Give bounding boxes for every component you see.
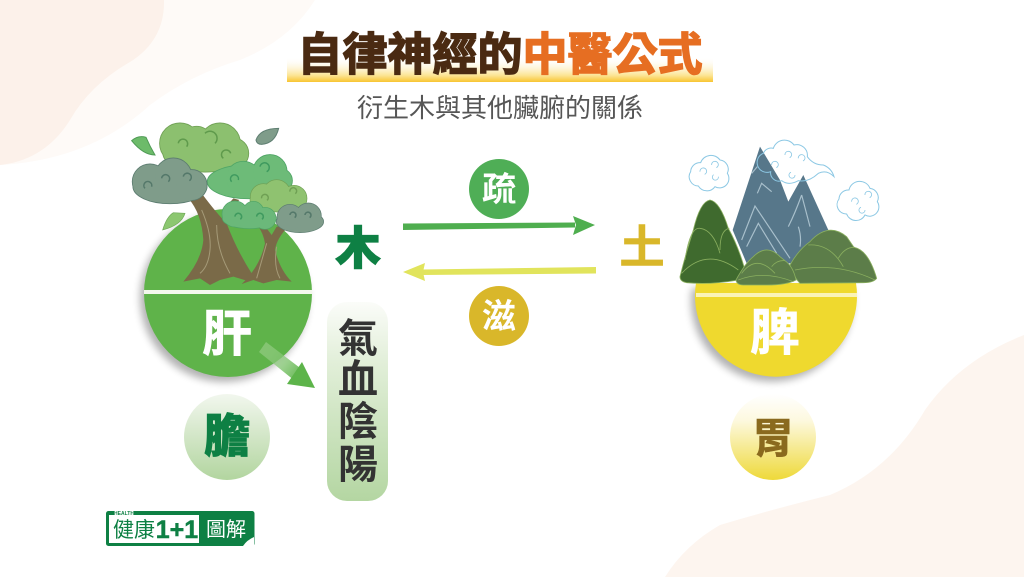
logo: HEALTH bbox=[114, 511, 134, 517]
gallbladder circle bbox=[184, 394, 270, 480]
right hills bbox=[790, 230, 877, 283]
earth character: 土 bbox=[619, 222, 665, 273]
outline clouds bbox=[689, 140, 879, 221]
badge: 滋: 滋 bbox=[482, 298, 516, 336]
logo: 1+1 bbox=[156, 516, 198, 544]
badge: 疏 bbox=[469, 159, 529, 219]
arrow: wood to earth bbox=[403, 216, 595, 235]
logo bbox=[106, 510, 254, 546]
circle shadow bbox=[691, 288, 853, 382]
dark green hills bbox=[680, 200, 744, 283]
divider bbox=[696, 293, 857, 297]
divider bbox=[144, 290, 312, 294]
leaves bbox=[132, 137, 155, 155]
badge: 滋 bbox=[469, 286, 529, 346]
mountain illustration bbox=[680, 140, 879, 285]
liver circle with tree bbox=[132, 123, 323, 382]
badge: 疏: 疏 bbox=[482, 171, 516, 209]
mountains bbox=[733, 147, 828, 263]
trunks bbox=[183, 193, 252, 285]
middle hills bbox=[736, 250, 796, 285]
title highlight band bbox=[287, 57, 713, 82]
stomach circle: 胃 bbox=[752, 415, 794, 462]
title bbox=[287, 29, 713, 82]
panel: qi blood yin yang pill bbox=[327, 302, 388, 501]
cloud canopy bbox=[160, 123, 248, 172]
panel: qi blood yin yang pill: 血 bbox=[338, 358, 378, 402]
肝 label: 肝 bbox=[202, 306, 252, 362]
tree illustration bbox=[132, 123, 323, 285]
gallbladder circle: 膽 bbox=[204, 410, 250, 462]
panel: qi blood yin yang pill: 氣 bbox=[338, 317, 378, 361]
panel: qi blood yin yang pill: 陰 bbox=[338, 400, 378, 444]
subtitle: 衍生木與其他臟腑的關係 bbox=[357, 93, 643, 123]
spleen half circle bbox=[695, 283, 857, 377]
liver circle bbox=[144, 209, 312, 377]
spleen circle with mountains bbox=[680, 140, 879, 382]
脾 label: 脾 bbox=[750, 305, 800, 361]
background: bottom-right peach shape bbox=[665, 335, 1024, 577]
logo: 圖解 bbox=[206, 518, 246, 541]
panel: qi blood yin yang pill: 陽 bbox=[338, 443, 378, 487]
logo: 健康 bbox=[113, 519, 155, 542]
circle shadow bbox=[140, 214, 308, 382]
title text: 自律神經的中醫公式 bbox=[297, 29, 703, 80]
background: top-left peach shape bbox=[0, 0, 315, 165]
wood character: 木 bbox=[335, 223, 381, 274]
arrow: liver to qi-blood bbox=[259, 342, 315, 388]
arrow: earth to wood bbox=[403, 263, 596, 281]
stomach circle bbox=[730, 394, 816, 480]
